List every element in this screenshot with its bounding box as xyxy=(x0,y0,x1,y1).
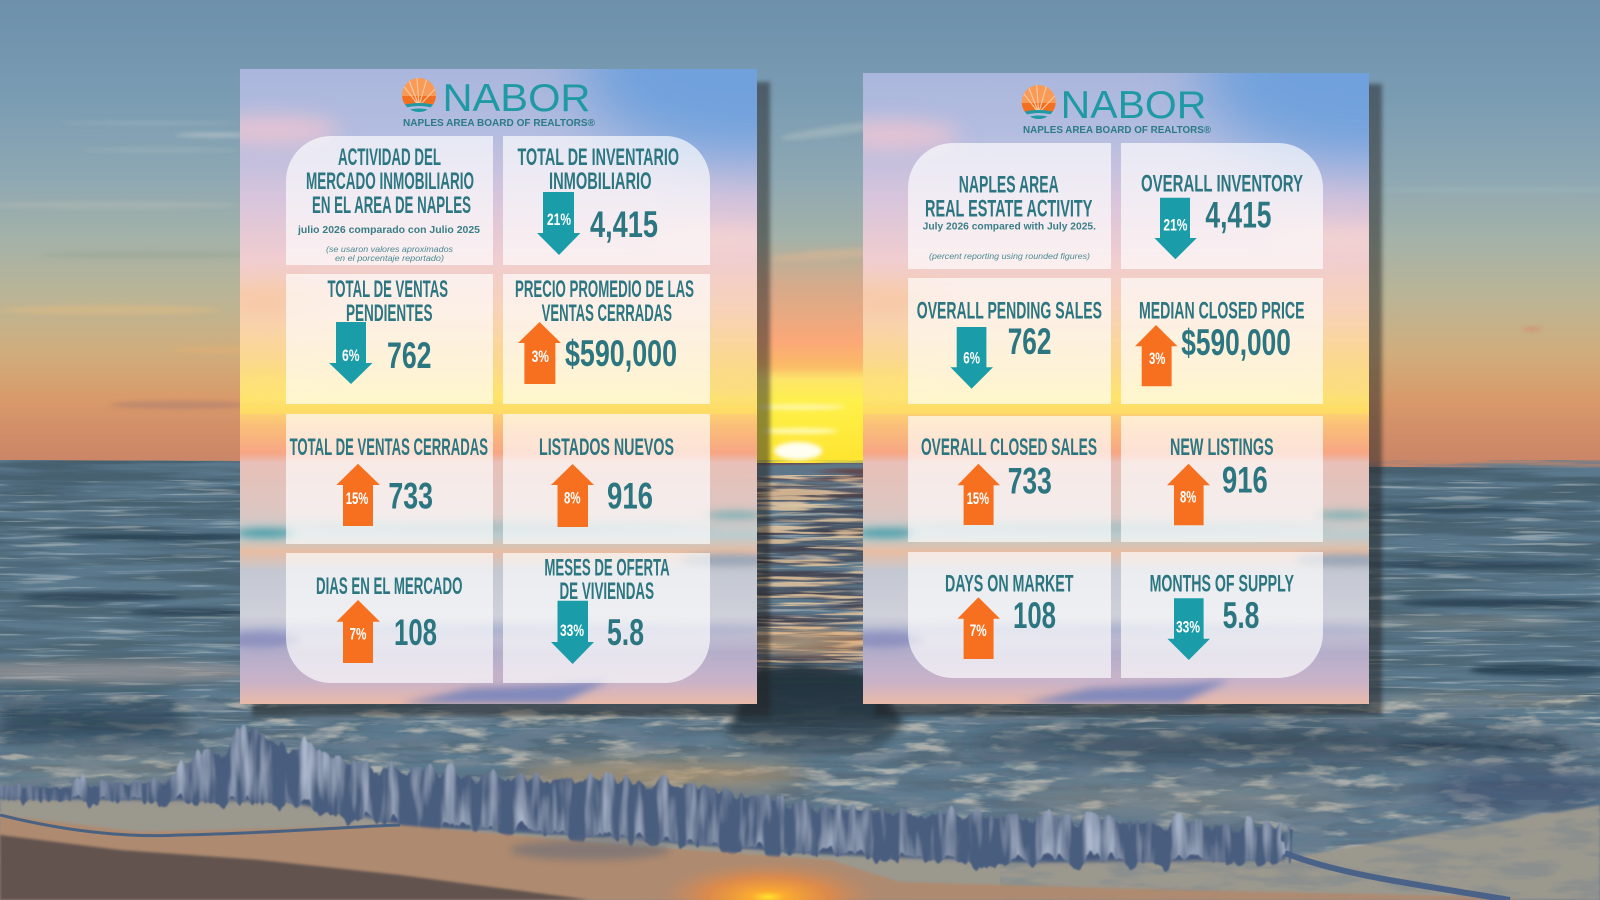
wave base xyxy=(0,745,1285,862)
panel: days on market: 108 xyxy=(1013,595,1056,636)
panel: total inventory xyxy=(503,136,710,265)
lower shore foam xyxy=(0,798,1600,900)
panel: closed sales: TOTAL DE VENTAS CERRADAS xyxy=(290,434,488,461)
panel: market activity title: MERCADO INMOBILIARIO xyxy=(306,168,474,195)
panel: days on market: 108 xyxy=(394,612,437,653)
panel: median closed price: $590,000 xyxy=(1181,322,1291,363)
panel: overall closed sales: 733 xyxy=(1008,460,1052,501)
wet sand xyxy=(0,815,1520,900)
icon: up arrow 7% xyxy=(336,600,380,663)
panel: pending sales xyxy=(286,274,493,404)
icon: up arrow 15%: 15% xyxy=(967,489,989,508)
icon: up arrow 3%: 3% xyxy=(1149,349,1165,368)
panel: pending sales: TOTAL DE VENTAS xyxy=(328,276,448,303)
panel: months of supply: 5.8 xyxy=(607,612,644,653)
panel: closed sales: 733 xyxy=(388,476,433,517)
logo: NABOR: NAPLES AREA BOARD OF REALTORS® xyxy=(1023,124,1211,136)
logo: NABOR: NABOR xyxy=(442,77,590,120)
sea xyxy=(0,460,1600,900)
shadow: left poster xyxy=(252,82,770,716)
icon: down arrow 6%: 6% xyxy=(963,348,980,367)
shadow: right poster xyxy=(875,84,1382,716)
icon: up arrow 8% xyxy=(1167,464,1210,525)
icon: up arrow 15%: 15% xyxy=(346,489,368,508)
icon: shell xyxy=(402,78,436,112)
icon: up arrow 15% xyxy=(957,464,1000,525)
panel: Spanish poster xyxy=(240,69,757,704)
panel: months of supply xyxy=(503,553,710,683)
sun glow xyxy=(757,240,863,466)
wave xyxy=(0,727,1285,864)
icon: down arrow 21% xyxy=(1154,198,1197,259)
panel: overall inventory: OVERALL INVENTORY xyxy=(1141,171,1303,198)
panel: new listings: 916 xyxy=(607,476,653,517)
panel: total inventory: TOTAL DE INVENTARIO xyxy=(518,144,679,171)
panel: days on market: DIAS EN EL MERCADO xyxy=(316,573,462,600)
icon: up arrow 7%: 7% xyxy=(970,621,987,640)
panel: real estate activity title: NAPLES AREA xyxy=(959,172,1059,199)
panel: new listings xyxy=(1121,416,1323,542)
panel: real estate activity title: REAL ESTATE ACTIVITY xyxy=(925,196,1092,223)
foam zone xyxy=(0,695,1600,865)
panel: market activity title xyxy=(286,136,493,265)
panel: months of supply: 5.8 xyxy=(1223,595,1259,636)
poster background xyxy=(863,73,1369,704)
panel: total inventory: INMOBILIARIO xyxy=(549,168,652,195)
icon: shell xyxy=(1021,85,1057,119)
panel: overall pending sales xyxy=(908,278,1111,404)
icon: down arrow 21%: 21% xyxy=(547,210,571,229)
swells xyxy=(20,507,1600,749)
icon: down arrow 33%: 33% xyxy=(1176,618,1200,637)
icon: up arrow 7%: 7% xyxy=(350,625,366,644)
panel: overall inventory xyxy=(1121,143,1323,269)
panel: overall pending sales: 762 xyxy=(1008,321,1051,362)
panel: new listings: LISTADOS NUEVOS xyxy=(539,434,674,461)
sun reflection on sand xyxy=(658,861,878,900)
panel: average closed price: $590,000 xyxy=(565,333,677,374)
panel: months of supply: DE VIVIENDAS xyxy=(560,578,654,605)
panel: closed sales xyxy=(286,414,493,544)
panel: overall inventory: 4,415 xyxy=(1205,195,1272,236)
logo: NABOR: NABOR xyxy=(1061,84,1206,127)
icon: up arrow 8%: 8% xyxy=(564,489,580,508)
panel: days on market xyxy=(286,553,493,683)
icon: up arrow 15% xyxy=(336,464,380,526)
panel: overall closed sales xyxy=(908,416,1111,542)
panel: overall pending sales: OVERALL PENDING SALES xyxy=(917,297,1102,324)
panel: real estate activity title xyxy=(908,143,1111,269)
panel: months of supply xyxy=(1121,552,1323,678)
panel: average closed price xyxy=(503,274,710,404)
panel: months of supply: MESES DE OFERTA xyxy=(544,554,670,581)
dry sand xyxy=(0,835,590,900)
panel: real estate activity title: (percent reporting using rounded figures) xyxy=(929,251,1090,261)
panel: median closed price: MEDIAN CLOSED PRICE xyxy=(1139,297,1304,324)
logo: NABOR: NAPLES AREA BOARD OF REALTORS® xyxy=(403,117,595,129)
panel: market activity title: ACTIVIDAD DEL xyxy=(338,144,441,171)
icon: up arrow 3% xyxy=(518,322,561,384)
icon: up arrow 8%: 8% xyxy=(1180,488,1196,507)
icon: down arrow 6% xyxy=(950,327,993,389)
panel: market activity title: (se usaron valores aproximados xyxy=(326,244,454,254)
logo: NABOR xyxy=(402,77,595,129)
panel: new listings xyxy=(503,414,710,544)
panel: days on market: DAYS ON MARKET xyxy=(945,570,1074,597)
icon: up arrow 7% xyxy=(957,597,1000,659)
panel: market activity title: EN EL AREA DE NAPLES xyxy=(312,192,471,219)
panel: new listings: NEW LISTINGS xyxy=(1170,434,1274,461)
panel: market activity title: julio 2026 comparado con Julio 2025 xyxy=(297,225,480,236)
panel: months of supply: MONTHS OF SUPPLY xyxy=(1150,570,1294,597)
icon: up arrow 3%: 3% xyxy=(532,347,549,366)
panel: market activity title: en el porcentaje reportado) xyxy=(335,253,444,263)
icon: down arrow 21%: 21% xyxy=(1163,216,1188,235)
logo: NABOR xyxy=(1021,84,1211,136)
panel: English poster xyxy=(863,73,1369,704)
icon: up arrow 8% xyxy=(551,464,594,527)
panel: total inventory: 4,415 xyxy=(590,204,658,245)
icon: down arrow 6%: 6% xyxy=(342,346,360,365)
panel: days on market xyxy=(908,552,1111,678)
panel: overall closed sales: OVERALL CLOSED SALES xyxy=(921,434,1097,461)
panel: median closed price xyxy=(1121,278,1323,404)
panel: real estate activity title: July 2026 compared with July 2025. xyxy=(923,221,1096,232)
panel: new listings: 916 xyxy=(1222,460,1268,501)
panel: average closed price: VENTAS CERRADAS xyxy=(542,300,672,327)
panel: average closed price: PRECIO PROMEDIO DE LAS xyxy=(515,276,694,303)
icon: down arrow 33% xyxy=(551,601,594,664)
poster background xyxy=(240,69,757,704)
icon: down arrow 33%: 33% xyxy=(560,621,584,640)
icon: down arrow 33% xyxy=(1167,598,1210,660)
icon: down arrow 6% xyxy=(329,322,372,384)
panel: pending sales: 762 xyxy=(387,335,432,376)
panel: pending sales: PENDIENTES xyxy=(346,300,432,327)
icon: up arrow 3% xyxy=(1135,325,1178,386)
icon: down arrow 21% xyxy=(537,192,580,255)
